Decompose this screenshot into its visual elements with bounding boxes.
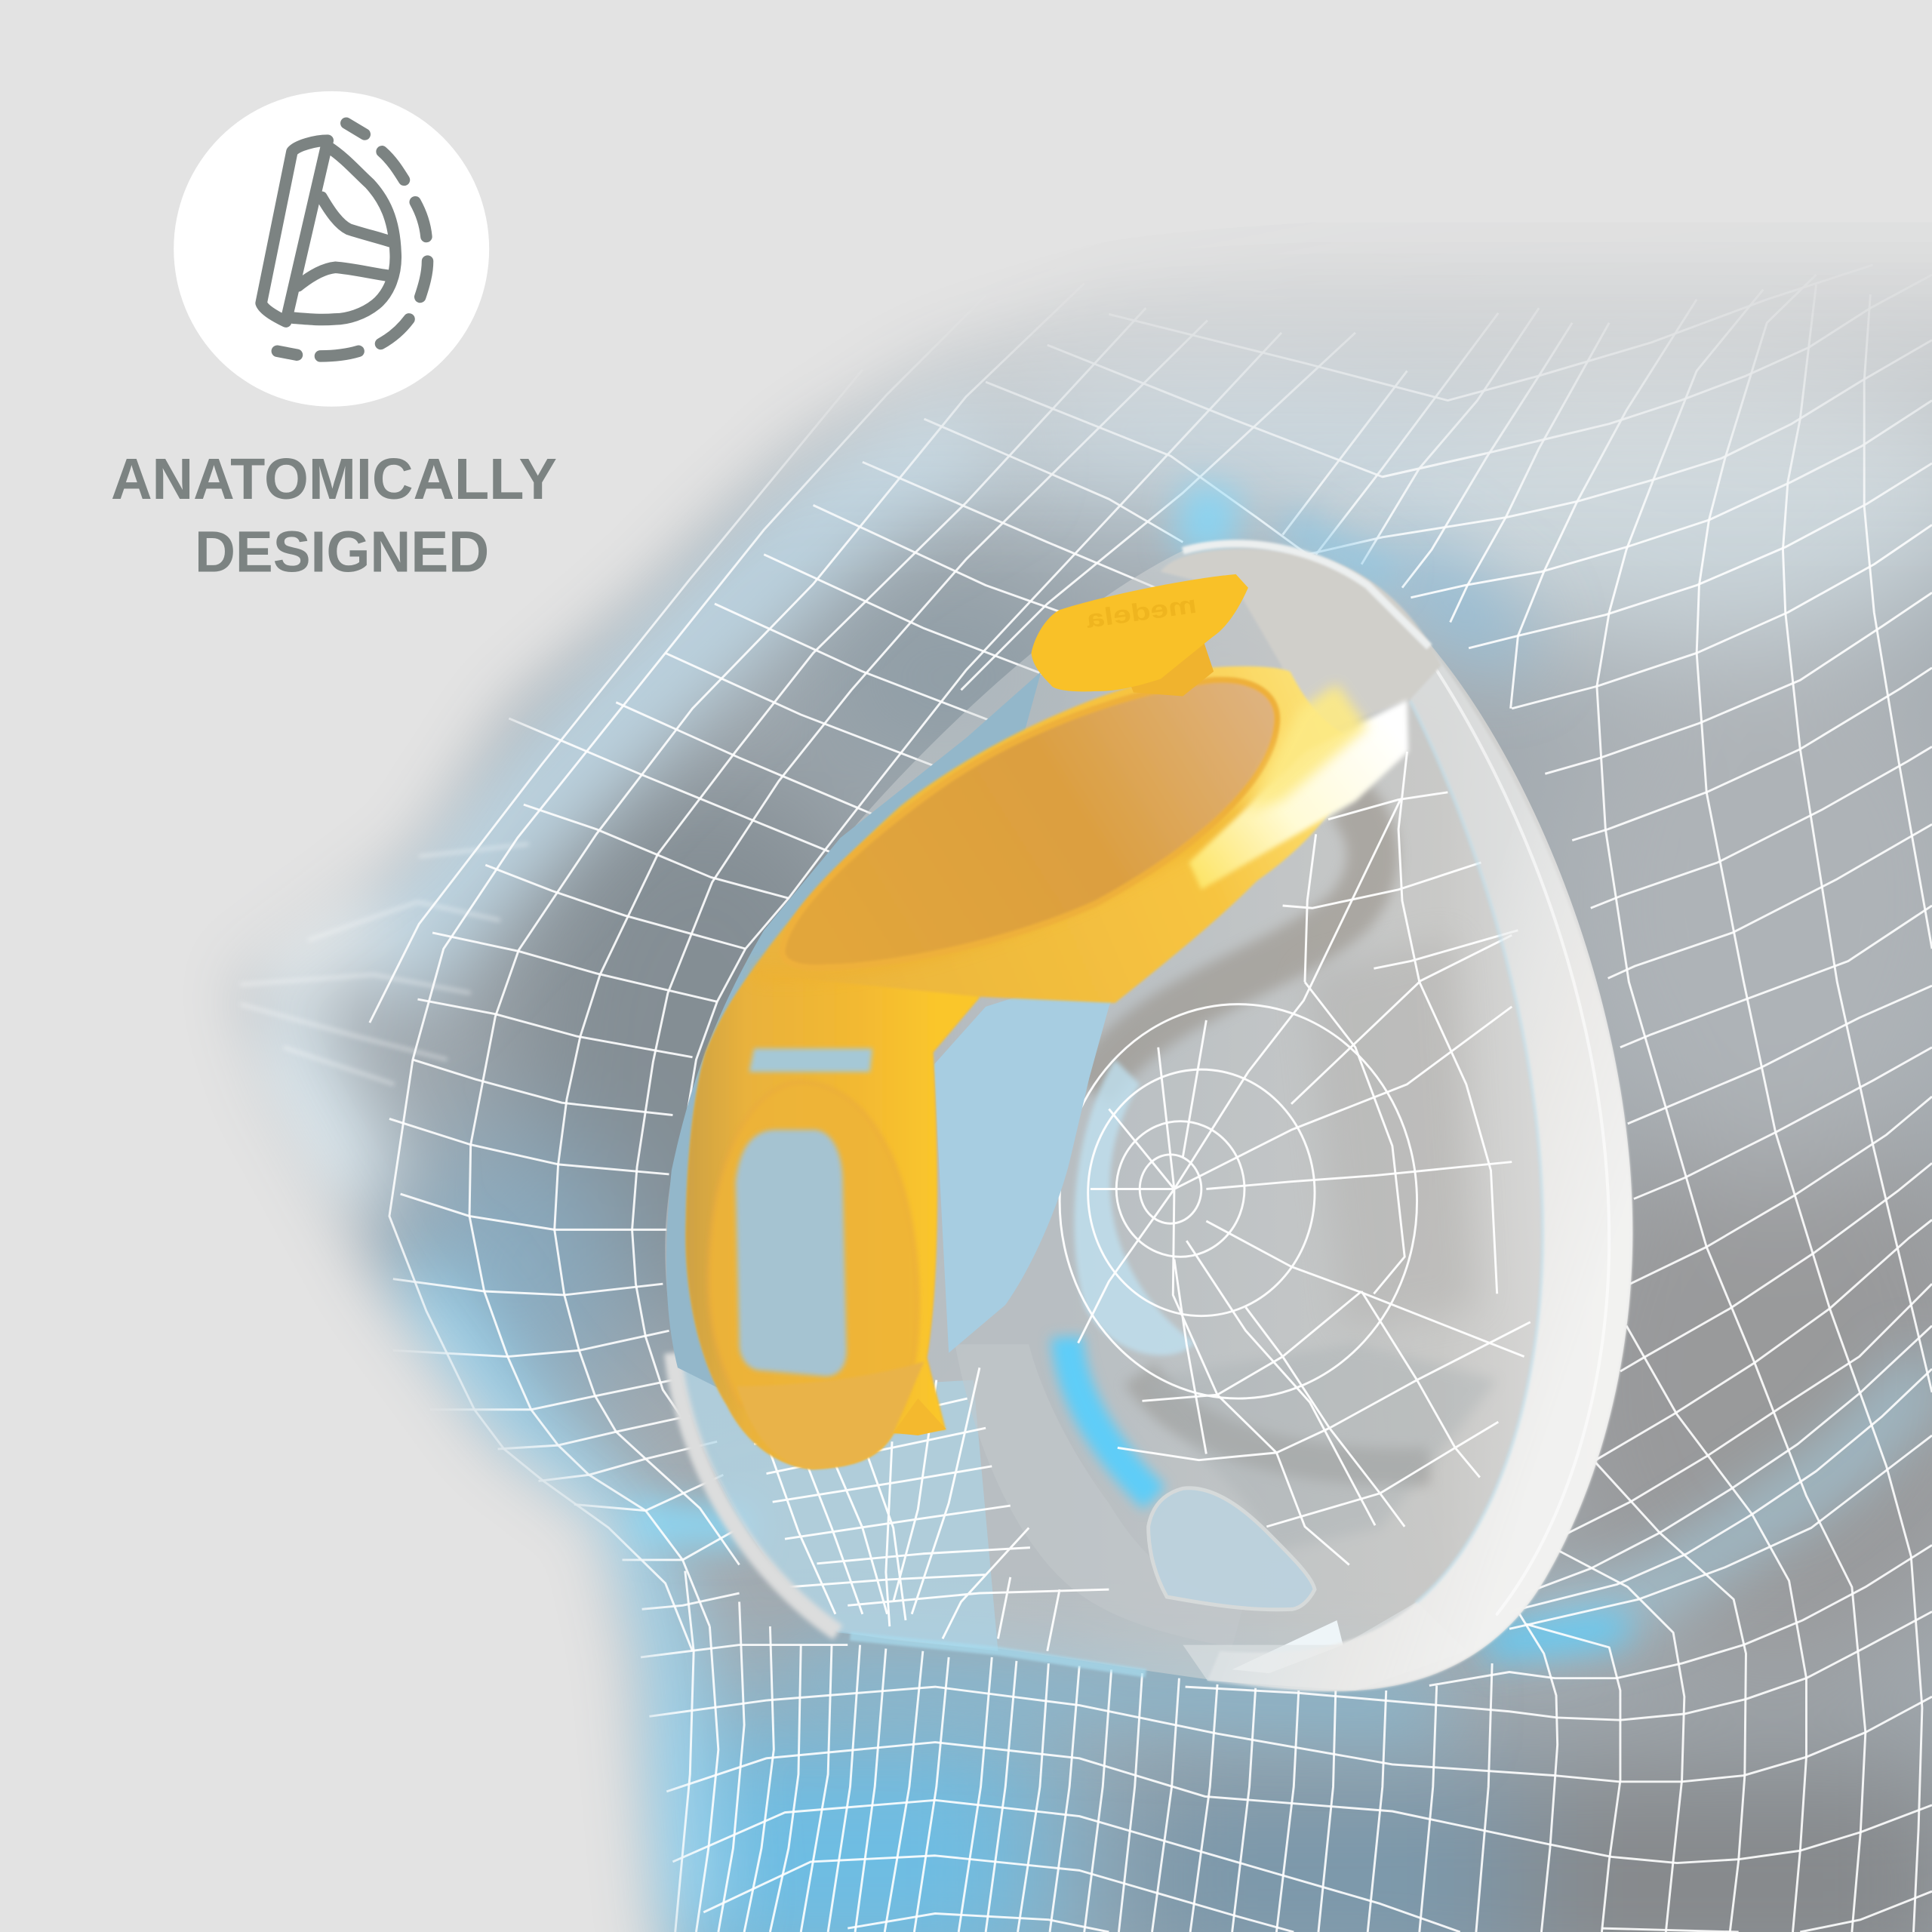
- rim bottom: [851, 1636, 1146, 1673]
- body mesh surface: [223, 263, 1932, 1932]
- panel: breast shield cup: [665, 543, 1632, 1691]
- cup base wall: [1183, 1601, 1466, 1690]
- ring shading: [754, 789, 1281, 975]
- icon: white badge: [174, 91, 489, 407]
- cyan crescent: [1067, 1337, 1155, 1498]
- strap: [686, 974, 980, 1469]
- left columns: [370, 284, 1355, 1651]
- orange diaphragm: [782, 680, 1277, 968]
- inner gray tone: [1306, 937, 1478, 1331]
- lower lobe: [737, 1361, 924, 1469]
- title: ANATOMICALLY: [111, 448, 557, 512]
- shadow arcs seen through the shell: [1091, 801, 1429, 1467]
- clip hinge: [1128, 635, 1214, 696]
- bottom columns: [675, 1571, 1492, 1932]
- rim lower left: [672, 1353, 838, 1632]
- lower foot: [894, 1398, 946, 1435]
- faint streaks near the tip: [240, 844, 528, 1084]
- panel: yellow membrane housing: [686, 635, 1408, 1469]
- window: [736, 1130, 847, 1377]
- upper clear shell: [1161, 549, 1441, 740]
- lower lobe: [1140, 1343, 1497, 1552]
- highlight: [1189, 700, 1408, 890]
- rim contour lines: [1411, 641, 1609, 1614]
- shell rim top: [1183, 543, 1429, 647]
- slot: [749, 1048, 872, 1072]
- right rows: [1383, 401, 1932, 1629]
- valve tip: [1232, 1620, 1343, 1673]
- blue glow at the top of the cup: [1201, 487, 1392, 579]
- lower right sweeps: [1518, 1326, 1806, 1932]
- cup rim right: [1208, 604, 1632, 1691]
- yellow glow: [1244, 684, 1367, 814]
- tab logo: medela: [1084, 590, 1198, 633]
- lower cup mesh: [754, 1367, 1109, 1651]
- icon: anatomical shield glyph: [261, 123, 428, 356]
- title: DESIGNED: [195, 521, 489, 585]
- valve petal: [1149, 1488, 1315, 1610]
- funnel wall: [955, 1344, 1244, 1647]
- window ring: [709, 1081, 918, 1417]
- right columns: [1283, 275, 1932, 1932]
- title: [111, 448, 557, 585]
- yellow ring and strap: [686, 666, 1355, 1469]
- panel: blue strap panel: [934, 961, 1129, 1353]
- lower-left cup wall: [678, 1355, 998, 1651]
- cup body: [665, 543, 1632, 1691]
- panel: blue flange: [666, 672, 1041, 1392]
- inner funnel: [1074, 1060, 1195, 1355]
- wireframe mesh lines: [370, 265, 1932, 1932]
- left rows: [389, 265, 1932, 1657]
- bottom rows: [649, 1545, 1932, 1932]
- icon: yellow tab: [1032, 574, 1248, 691]
- web mesh on the nipple: [754, 752, 1531, 1651]
